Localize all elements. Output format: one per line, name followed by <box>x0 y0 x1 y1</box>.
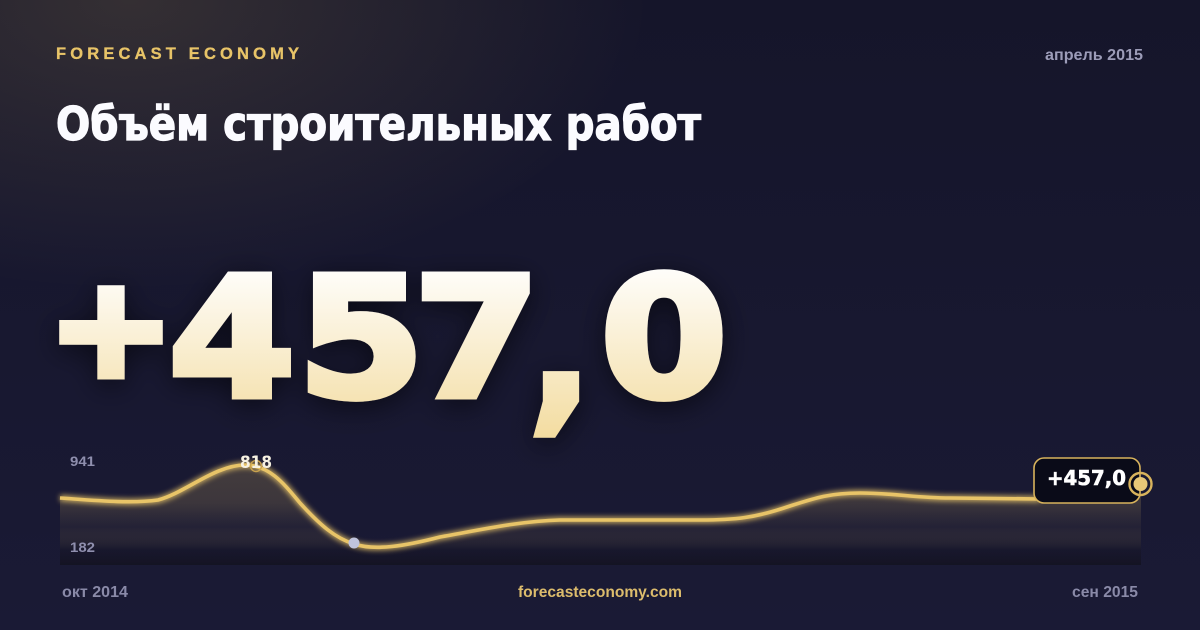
sparkline chart <box>60 453 1152 565</box>
line <box>60 465 1040 547</box>
max marker <box>250 460 262 472</box>
big number: , <box>524 228 598 455</box>
date label: апрель 2015 <box>1045 47 1143 64</box>
big number: 4 <box>168 243 296 436</box>
big number: 7 <box>413 243 540 436</box>
value callout: +457,0 <box>1047 466 1126 490</box>
big number: 0 <box>600 243 727 436</box>
axis min label: 182 <box>70 539 95 555</box>
min marker <box>348 538 360 548</box>
value callout <box>1034 458 1140 503</box>
website: forecasteconomy.com <box>518 584 682 601</box>
axis max label: 941 <box>70 453 95 469</box>
big number <box>48 228 727 455</box>
end marker <box>1130 473 1152 495</box>
start date label: окт 2014 <box>62 584 128 601</box>
end date label: сен 2015 <box>1072 584 1138 601</box>
line glow <box>60 465 1040 547</box>
big number: + <box>48 248 174 407</box>
chart area fill <box>60 465 1141 565</box>
max label: 818 <box>240 453 272 472</box>
title: Объём строительных работ <box>56 97 701 151</box>
big number: 5 <box>297 243 425 436</box>
brand label: FORECAST ECONOMY <box>56 45 299 63</box>
